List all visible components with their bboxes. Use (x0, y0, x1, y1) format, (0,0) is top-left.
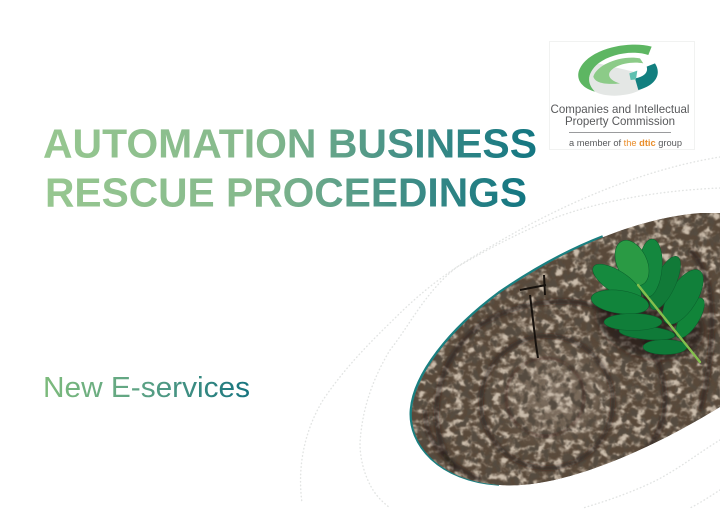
logo tagline: a member of the dtic group (569, 138, 682, 148)
tree rings (425, 250, 712, 480)
bark dark cracks (400, 205, 720, 495)
logo divider (569, 132, 671, 133)
photo: tree trunk rings with leaf (400, 205, 720, 495)
title line 2: RESCUE PROCEEDINGS (45, 170, 527, 216)
logo panel (550, 42, 694, 150)
bark light patches (400, 205, 720, 495)
title line 1: AUTOMATION BUSINESS (43, 120, 537, 166)
pale centre of trunk (505, 353, 605, 437)
trunk crack (520, 275, 546, 358)
logo name line 1: Companies and Intellectual (550, 102, 690, 116)
teal edge of photo (411, 236, 603, 484)
leaf stem (638, 285, 700, 362)
dotted orbit lines (301, 157, 720, 508)
leaf shadow (592, 289, 708, 364)
logo name line 2: Property Commission (565, 114, 675, 128)
icon: logo swirl (578, 45, 658, 96)
icon: green leaf (588, 235, 711, 362)
bark base (400, 205, 720, 495)
subtitle: New E-services (43, 372, 250, 404)
title (43, 120, 537, 216)
